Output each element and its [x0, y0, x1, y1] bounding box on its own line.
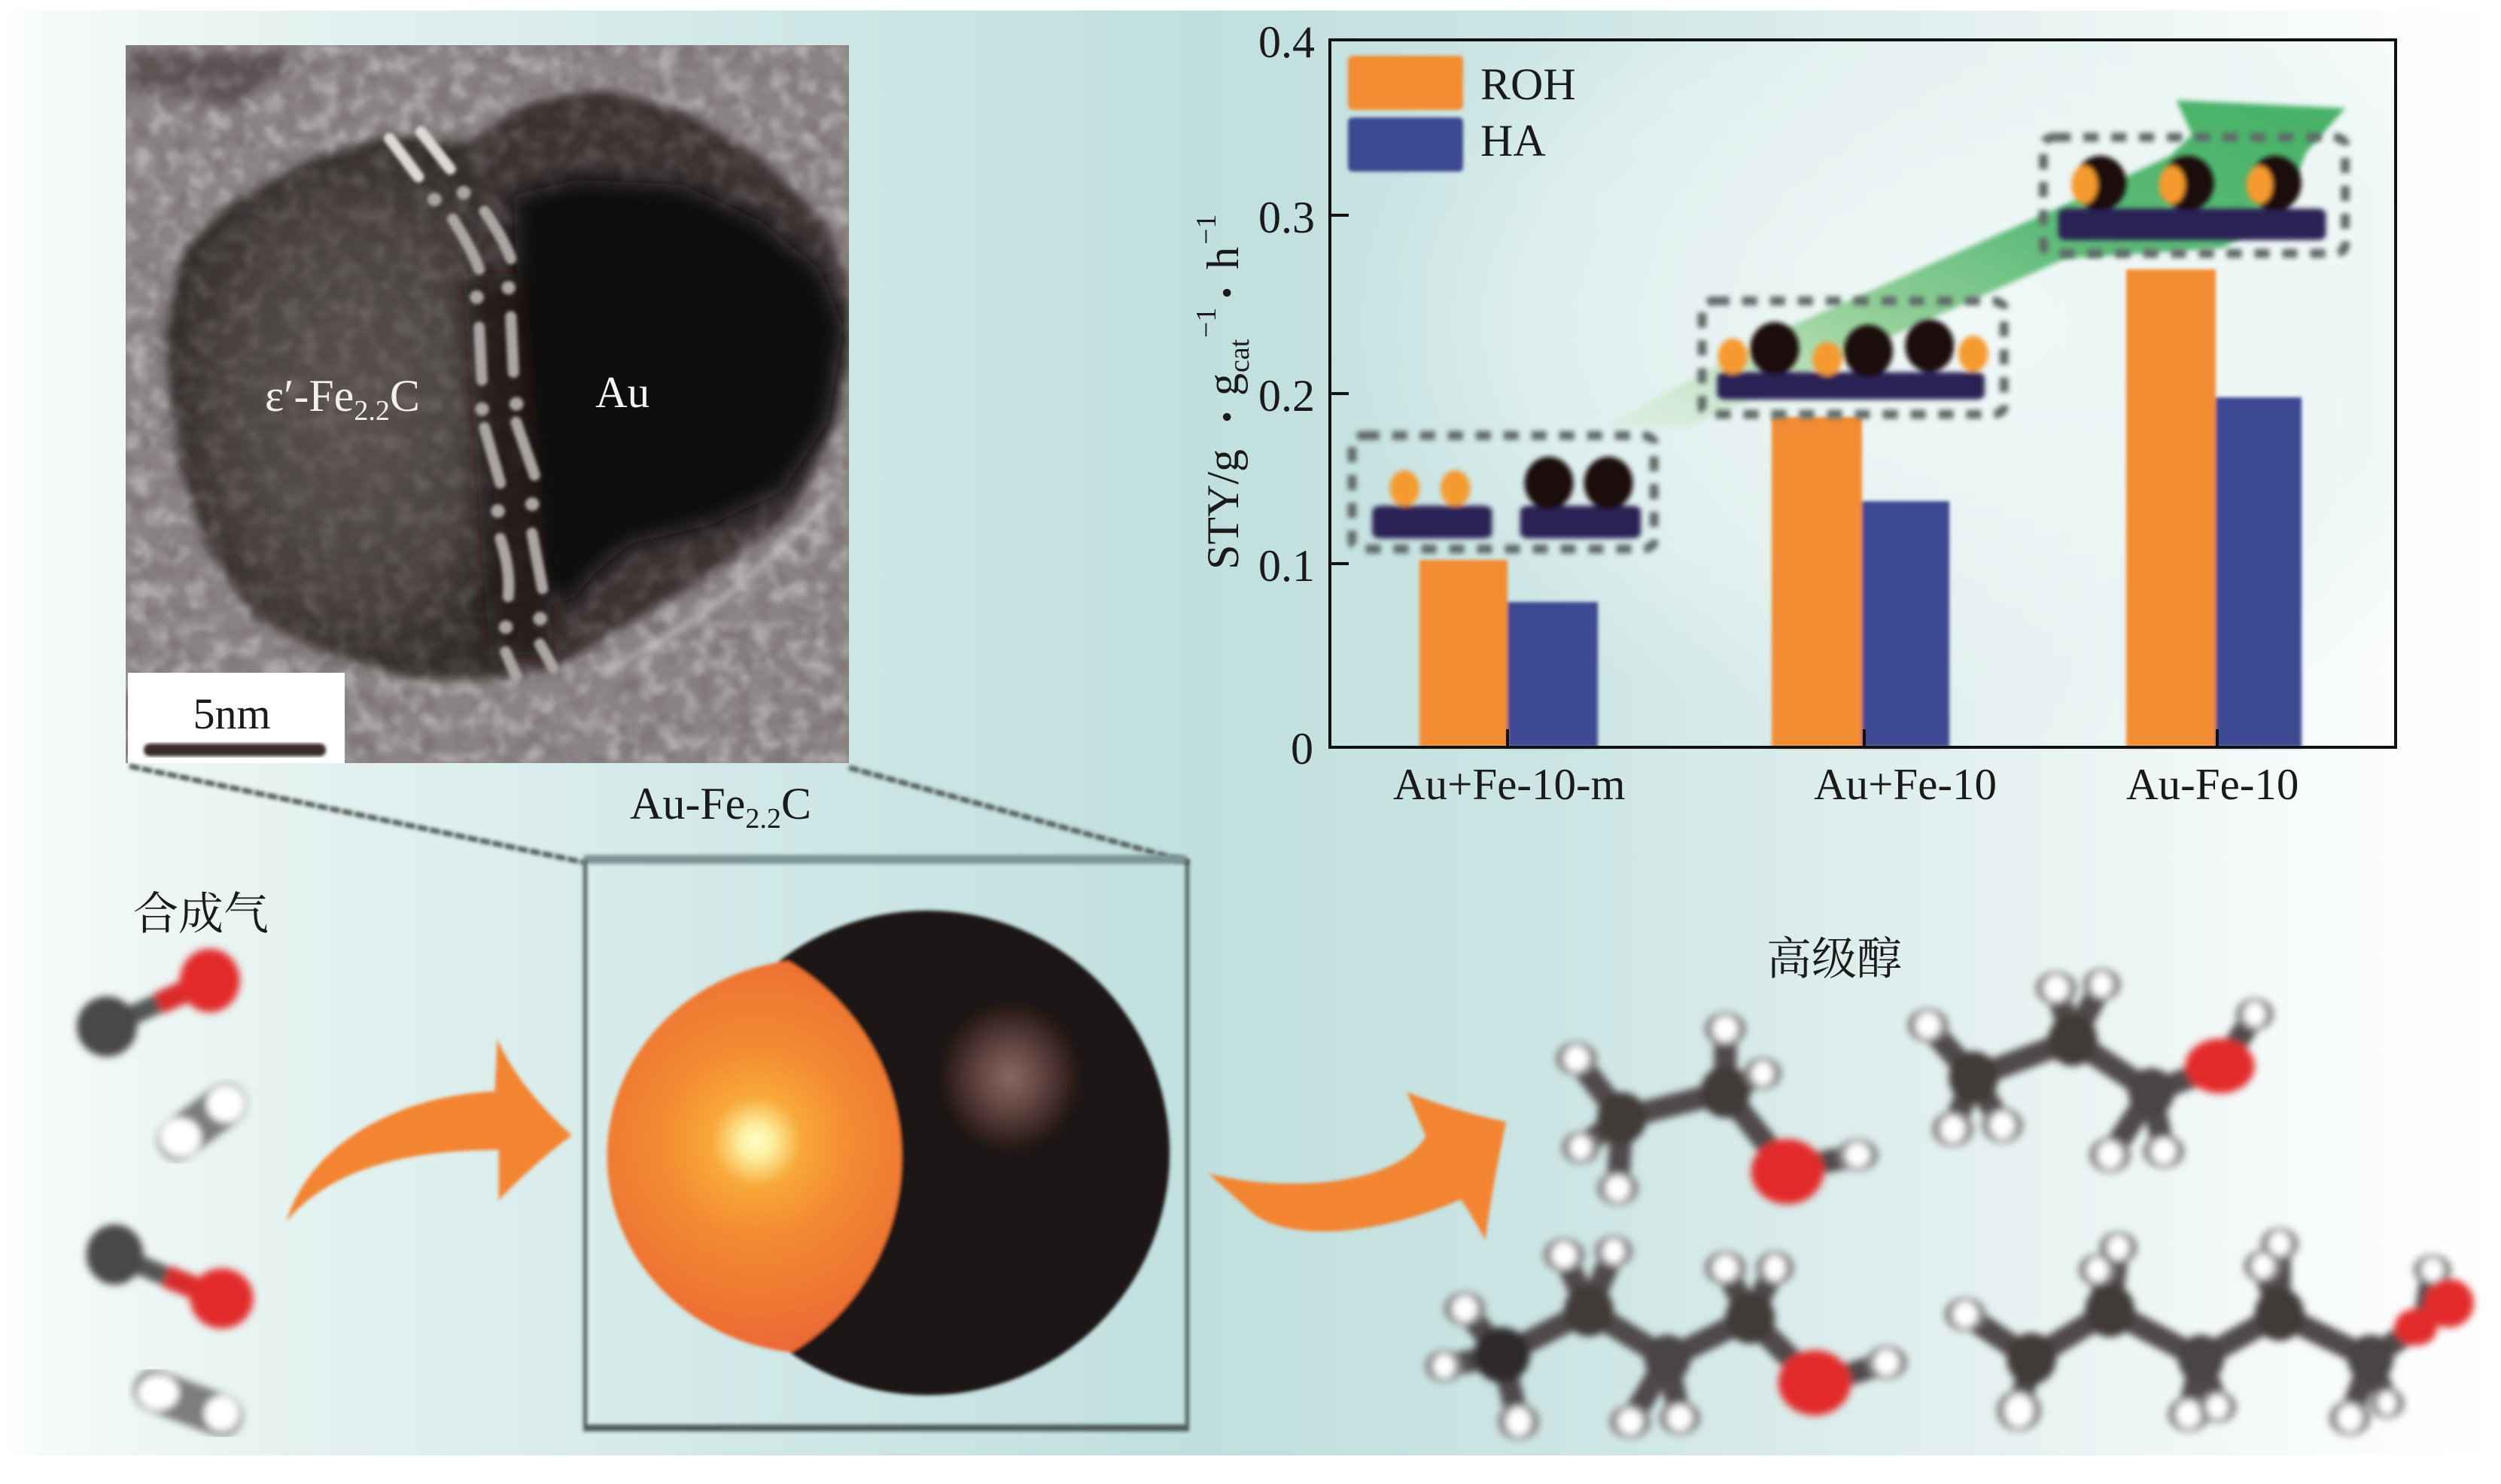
label: Au: Au	[595, 367, 650, 417]
icon: H2 molecule 1	[160, 1085, 245, 1157]
chart axes frame	[1330, 40, 2396, 747]
label: epsilon iron carbide: 2.2	[354, 395, 390, 427]
inset: adjacent sites	[1702, 301, 2004, 415]
icon: alcohol molecule, top left	[1560, 1014, 1874, 1204]
icon: Au-Fe2.2C nanoparticle	[607, 911, 1170, 1395]
inset: separated sites	[1352, 436, 1654, 549]
x axis labels	[1393, 759, 2299, 809]
y axis title: h	[1198, 247, 1248, 269]
inset: integrated particles	[2043, 137, 2345, 254]
y axis tick labels	[1258, 17, 1315, 774]
y axis title: cat	[1224, 339, 1255, 373]
label: syngas: 合成气	[133, 889, 269, 939]
y axis title: •	[1209, 287, 1246, 299]
bars: Au-Fe-10	[2126, 269, 2302, 747]
chart backdrop	[1330, 40, 2396, 747]
label: epsilon iron carbide: C	[390, 371, 420, 421]
legend	[1348, 56, 1576, 172]
icon: lattice fringe dashes	[389, 132, 553, 676]
y axis title: •	[1209, 411, 1246, 423]
scale bar: 5nm: 5nm	[193, 689, 271, 738]
y axis title: −1	[1191, 214, 1222, 245]
icon: CO molecule 1	[77, 949, 240, 1057]
y axis tick labels: 0.2	[1258, 371, 1315, 421]
y axis title: g	[1198, 373, 1248, 396]
bars: Au+Fe-10-m	[1419, 560, 1598, 747]
y axis title	[1191, 214, 1255, 570]
x axis labels: Au-Fe-10	[2126, 759, 2299, 809]
y axis tick labels: 0	[1291, 724, 1313, 774]
panel: bar chart	[1191, 17, 2396, 809]
icon: alcohol molecule, bottom right	[1949, 1230, 2474, 1434]
y axis tick labels: 0.3	[1258, 193, 1315, 242]
y axis tick labels: 0.1	[1258, 541, 1315, 591]
arrow: catalyst to alcohols	[1208, 1092, 1506, 1240]
icon: alcohol molecule, bottom left	[1429, 1237, 1903, 1438]
x axis labels: Au+Fe-10	[1814, 759, 1997, 809]
label: epsilon iron carbide: ε′-Fe	[265, 371, 354, 421]
y axis tick labels: 0.4	[1258, 17, 1315, 67]
label: higher alcohols: 高级醇	[1766, 935, 1902, 984]
y axis title: STY/g	[1198, 449, 1248, 570]
icon: alcohol molecule, top right	[1912, 971, 2270, 1170]
legend: ROH	[1480, 59, 1576, 109]
panel: catalyst box	[583, 855, 1189, 1431]
legend: HA	[1480, 116, 1546, 166]
arrow: syngas to catalyst	[287, 1039, 572, 1221]
icon: CO molecule 2	[87, 1224, 254, 1329]
x axis labels: Au+Fe-10-m	[1393, 759, 1626, 809]
green trend arrow	[1606, 100, 2345, 427]
scale bar: 5nm	[128, 673, 345, 763]
zoom guide lines	[129, 766, 1189, 862]
label: Au-Fe2.2C: C	[781, 779, 811, 829]
y axis title: −1	[1191, 308, 1222, 338]
label: Au-Fe2.2C: Au-Fe	[630, 779, 745, 829]
icon: H2 molecule 2	[138, 1375, 239, 1431]
bars: Au+Fe-10	[1772, 417, 1949, 747]
panel: TEM micrograph	[126, 45, 849, 763]
label: Au-Fe2.2C: 2.2	[745, 803, 781, 835]
